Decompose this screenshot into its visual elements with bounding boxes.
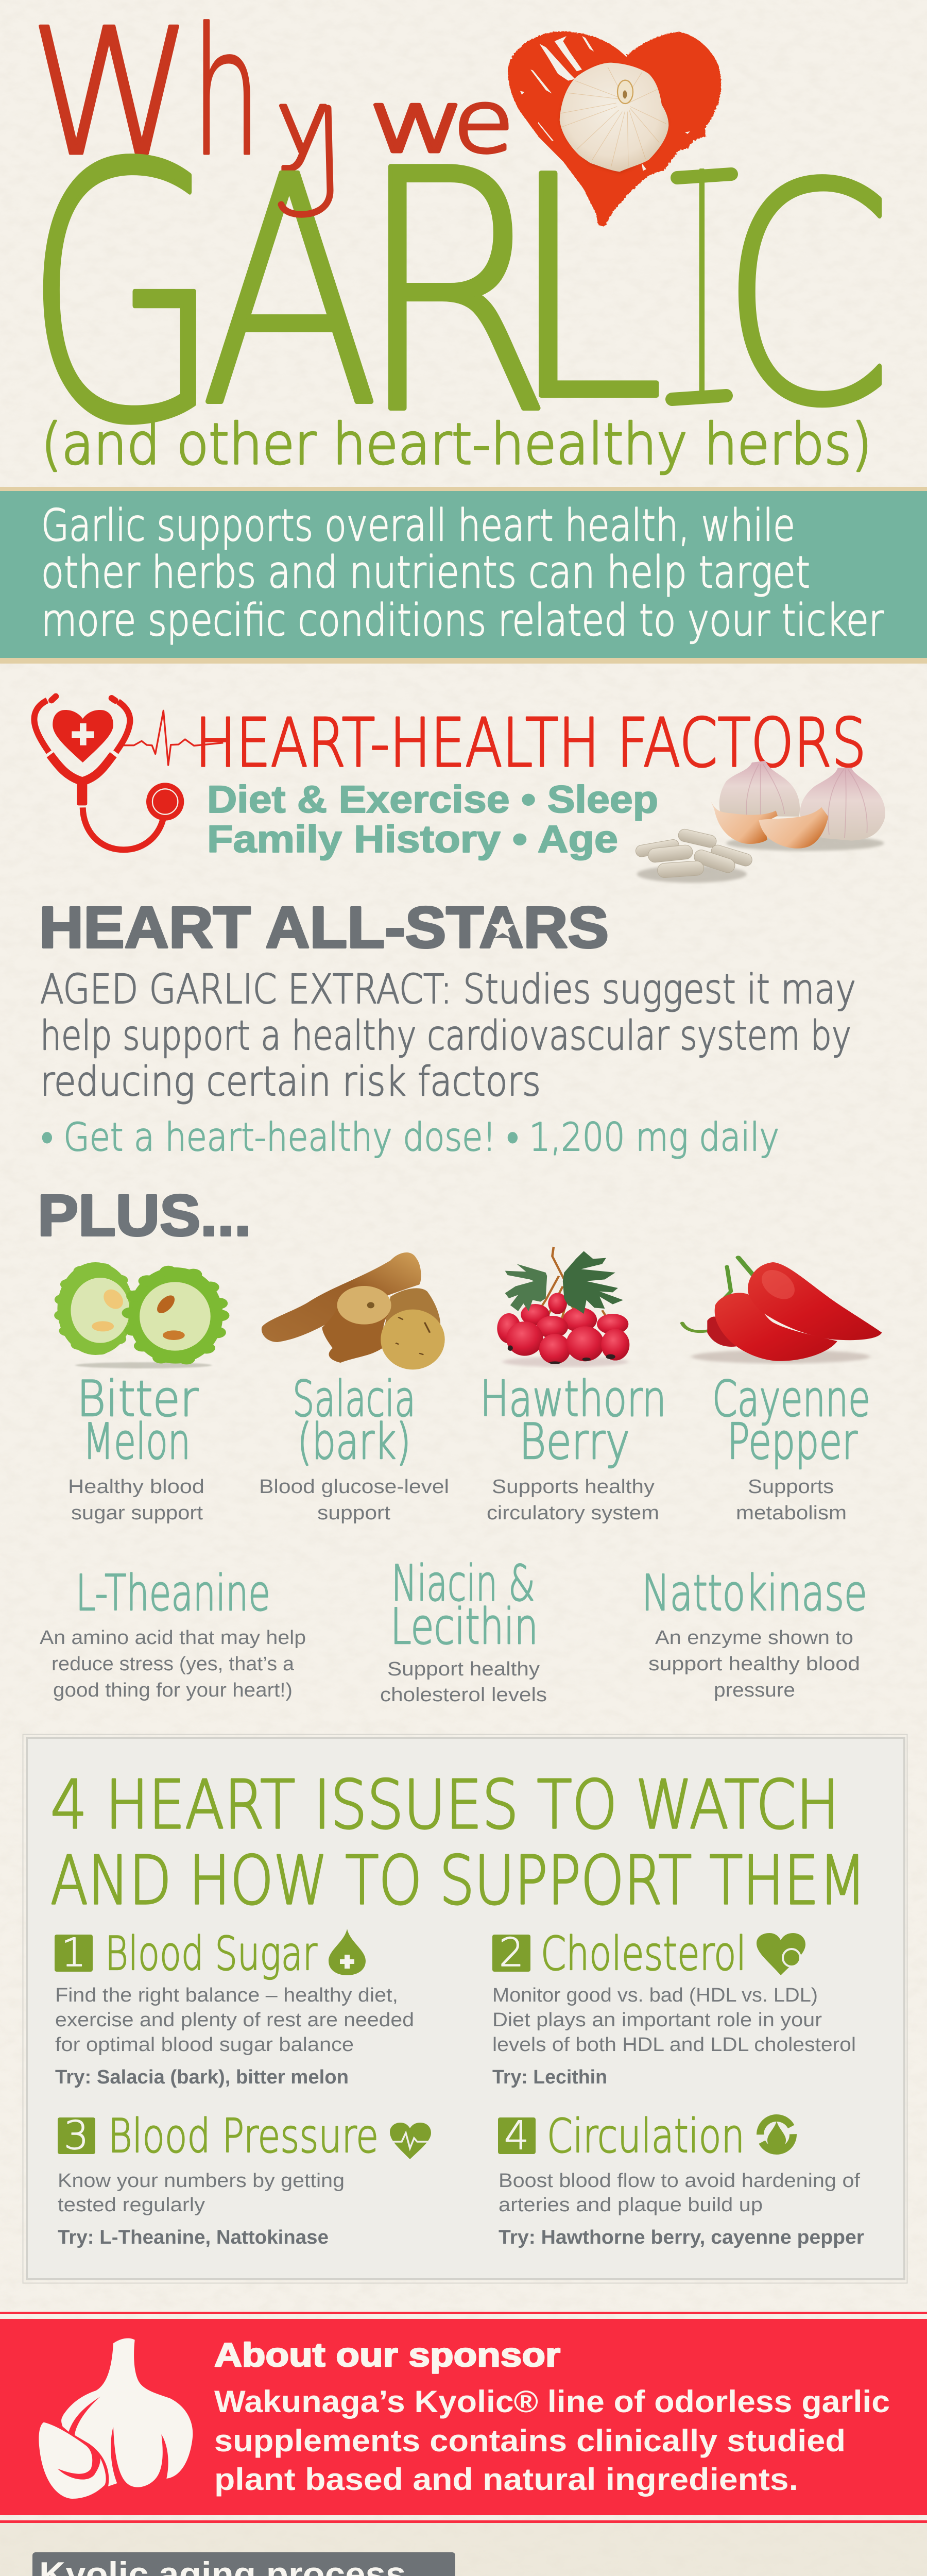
- issue 1: blood sugar: Blood Sugar: [105, 1927, 317, 1981]
- issue 4: circulation: Boost blood flow to avoid hardening of: [499, 2170, 860, 2192]
- herb descriptions row 2: reduce stress (yes, that’s a: [52, 1653, 295, 1675]
- factor list: Family History • Age: [207, 818, 618, 860]
- issue 1: blood sugar: exercise and plenty of rest are needed: [55, 2009, 414, 2031]
- intro text: other herbs and nutrients can help target: [41, 547, 810, 598]
- GARLIC letters: L: [506, 113, 665, 467]
- heading: plus: PLUS...: [38, 1183, 251, 1248]
- heart with garlic bulb: [508, 31, 721, 227]
- issue 3: blood pressure: Try: L-Theanine, Nattokinase: [58, 2227, 329, 2248]
- GARLIC letters: R: [355, 100, 554, 486]
- GARLIC letters: C: [720, 121, 893, 472]
- herb descriptions row 1: circulatory system: [487, 1502, 659, 1524]
- aged garlic extract paragraph: [40, 967, 856, 1105]
- herb descriptions row 1: Supports healthy: [492, 1476, 655, 1498]
- herb descriptions row 1: Healthy blood: [68, 1476, 204, 1498]
- sponsor band: [0, 2312, 927, 2523]
- issue 2: cholesterol: Monitor good vs. bad (HDL vs. LDL): [492, 1985, 818, 2006]
- herb names row 2: Nattokinase: [642, 1565, 867, 1622]
- issue 2: cholesterol: levels of both HDL and LDL cholesterol: [492, 2034, 856, 2056]
- herb descriptions row 2: An amino acid that may help: [40, 1627, 306, 1649]
- herb descriptions row 1: sugar support: [71, 1502, 203, 1524]
- icon: garlic silhouette: [39, 2338, 193, 2499]
- issue 2: cholesterol: Cholesterol: [541, 1927, 746, 1981]
- issue 1: blood sugar: 1: [61, 1929, 86, 1975]
- herb descriptions row 1: Supports: [748, 1476, 834, 1498]
- herb descriptions row 1: metabolism: [736, 1502, 847, 1524]
- dose line: • Get a heart-healthy dose! • 1,200 mg daily: [41, 1114, 779, 1160]
- issue 3: blood pressure: [58, 2109, 433, 2248]
- icon: stethoscope with heart: [34, 697, 223, 850]
- sponsor text: About our sponsor: [214, 2336, 560, 2374]
- herb descriptions row 2: cholesterol levels: [380, 1684, 547, 1706]
- issue 3: blood pressure: tested regularly: [58, 2194, 205, 2216]
- herb names row 1: Melon: [83, 1414, 191, 1470]
- herb names row 1: Pepper: [727, 1414, 857, 1470]
- issue 4: circulation: arteries and plaque build up: [499, 2194, 763, 2216]
- herb descriptions row 2: An enzyme shown to: [655, 1627, 853, 1649]
- photo: salacia bark: [262, 1252, 445, 1369]
- issue 1: blood sugar: Find the right balance – healthy diet,: [55, 1985, 398, 2006]
- GARLIC letters: A: [200, 111, 380, 476]
- sponsor text: [214, 2336, 890, 2497]
- sponsor text: plant based and natural ingredients.: [214, 2462, 798, 2497]
- issue 4: circulation: [498, 2109, 864, 2248]
- issue 2: cholesterol: Diet plays an important role in your: [492, 2009, 822, 2031]
- herb names row 1: Cayenne: [712, 1371, 870, 1428]
- Why we: w: [368, 73, 466, 172]
- herb descriptions row 2: good thing for your heart!): [53, 1680, 293, 1701]
- herb names row 1: [77, 1371, 870, 1470]
- GARLIC letters: I: [690, 108, 714, 476]
- panel heading: [50, 1766, 866, 1920]
- herb names row 1: Hawthorn: [480, 1371, 666, 1428]
- herb descriptions row 2: support healthy blood: [648, 1653, 860, 1675]
- factor list: Diet & Exercise • Sleep: [207, 778, 658, 821]
- herb descriptions row 1: Blood glucose-level: [259, 1476, 449, 1498]
- issue 2: cholesterol: [492, 1927, 856, 2088]
- issue 1: blood sugar: Try: Salacia (bark), bitter melon: [55, 2066, 349, 2088]
- herb descriptions row 2: Support healthy: [387, 1658, 540, 1680]
- issue 2: cholesterol: Try: Lecithin: [492, 2066, 607, 2088]
- Why we: y: [276, 73, 330, 175]
- issue 4: circulation: Circulation: [547, 2109, 745, 2163]
- factor list: [207, 778, 658, 860]
- aged garlic extract paragraph: reducing certain risk factors: [40, 1059, 541, 1105]
- sponsor text: Wakunaga’s Kyolic® line of odorless garlic: [214, 2384, 890, 2419]
- y descender overlapping the A: [281, 108, 330, 214]
- issue 2: cholesterol: 2: [499, 1929, 524, 1975]
- herb names row 2: [76, 1555, 867, 1655]
- issue 3: blood pressure: Blood Pressure: [108, 2109, 379, 2163]
- title: Why we love GARLIC: [24, 0, 893, 501]
- herb names row 2: Lecithin: [390, 1599, 538, 1655]
- herb names row 2: L-Theanine: [76, 1565, 270, 1622]
- photo: bitter melon: [57, 1262, 223, 1368]
- herb descriptions row 1: support: [317, 1502, 390, 1524]
- herb names row 1: Salacia: [293, 1371, 416, 1428]
- issue 1: blood sugar: [55, 1927, 414, 2088]
- teal intro band: [0, 487, 927, 664]
- herb descriptions row 2: [40, 1627, 860, 1706]
- photo: cayenne peppers: [682, 1258, 882, 1364]
- issue 3: blood pressure: Know your numbers by getting: [58, 2170, 345, 2192]
- Why we: [28, 0, 514, 195]
- issue 1: blood sugar: for optimal blood sugar balance: [55, 2034, 354, 2056]
- herb names row 1: Bitter: [77, 1371, 198, 1428]
- photo: garlic bulbs and capsules: [635, 761, 885, 883]
- photo: hawthorn berries: [497, 1247, 629, 1367]
- heading: heart all-stars: HEART ALL-STARS: [39, 895, 609, 960]
- herb names row 1: (bark): [297, 1414, 411, 1470]
- issue 4: circulation: Try: Hawthorne berry, cayenne pepper: [499, 2227, 864, 2248]
- herb descriptions row 1: [68, 1476, 847, 1524]
- herb descriptions row 2: pressure: [714, 1680, 795, 1701]
- issue 3: blood pressure: 3: [64, 2112, 89, 2158]
- Why we: e: [453, 73, 514, 172]
- GARLIC letters: G: [24, 91, 221, 501]
- herb names row 2: Niacin &: [391, 1555, 535, 1612]
- subtitle: (and other heart-healthy herbs): [41, 411, 872, 477]
- panel: 4 heart issues: [23, 1734, 907, 2283]
- sponsor text: supplements contains clinically studied: [214, 2424, 846, 2458]
- GARLIC letters: [24, 91, 893, 501]
- issue 4: circulation: 4: [504, 2112, 529, 2158]
- herb names row 1: Berry: [519, 1414, 630, 1470]
- intro text: [41, 500, 884, 646]
